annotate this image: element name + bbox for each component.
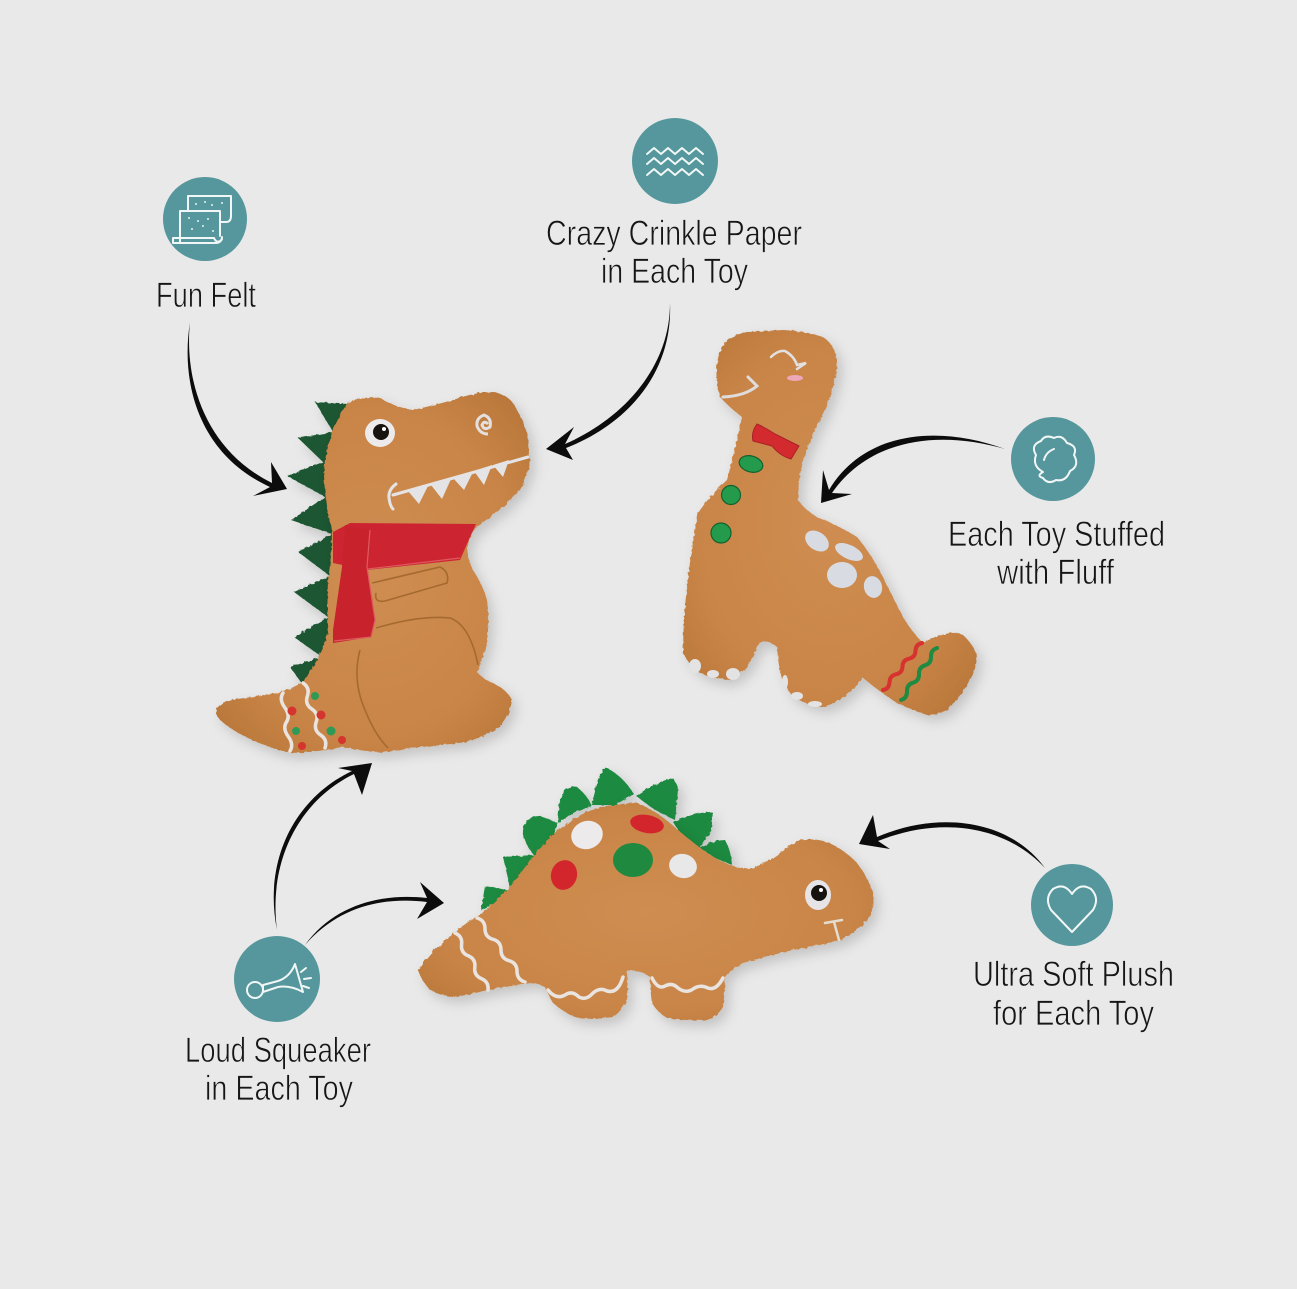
brontosaurus white toes <box>689 659 822 707</box>
t-rex arm and leg stitching <box>357 567 478 748</box>
icon: squeaker horn <box>234 936 320 1022</box>
callout: stuffed with fluff <box>948 417 1165 592</box>
toy: stegosaurus <box>418 767 873 1020</box>
brontosaurus white spots <box>801 526 885 600</box>
label: crazy crinkle paper in each toy: Crazy Crinkle Paper <box>546 214 802 253</box>
stegosaurus body <box>418 803 873 1020</box>
icon: fluff cloud <box>1011 417 1095 501</box>
stegosaurus eye <box>805 880 831 910</box>
label: ultra soft plush for each toy: Ultra Soft Plush <box>973 955 1174 994</box>
brontosaurus body <box>683 330 977 715</box>
arrow: squeaker to stegosaurus <box>305 882 444 945</box>
icon: felt sheets <box>163 177 247 261</box>
label: each toy stuffed with fluff: with Fluff <box>996 553 1114 592</box>
brontosaurus eye squiggle <box>771 351 806 369</box>
callout: fun felt <box>156 177 256 315</box>
brontosaurus tail stripes <box>883 643 937 700</box>
label: loud squeaker in each toy <box>185 1031 371 1108</box>
icon: heart <box>1031 864 1113 946</box>
label: ultra soft plush for each toy <box>973 955 1174 1033</box>
arrow: crinkle paper to t-rex <box>546 303 670 460</box>
t-rex nostril swirl <box>477 415 490 434</box>
stegosaurus mouth <box>825 920 842 940</box>
t-rex mouth and teeth <box>389 457 528 509</box>
icon: crinkle waves <box>632 118 718 204</box>
brontosaurus pink cheek <box>787 375 803 381</box>
toy: t-rex <box>216 392 530 753</box>
label: fun felt: Fun Felt <box>156 276 256 315</box>
arrow: fun felt to t-rex <box>188 322 287 496</box>
toy: brontosaurus <box>683 330 977 715</box>
t-rex tail icing <box>281 683 346 751</box>
label: crazy crinkle paper in each toy: in Each Toy <box>601 252 748 291</box>
label: crazy crinkle paper in each toy <box>546 214 802 291</box>
callout: ultra soft plush <box>973 864 1174 1033</box>
brontosaurus red bow tie <box>752 424 799 459</box>
label: each toy stuffed with fluff <box>948 515 1165 592</box>
t-rex body <box>216 392 530 753</box>
brontosaurus smile <box>723 377 757 397</box>
label: loud squeaker in each toy: Loud Squeaker <box>185 1031 371 1070</box>
brontosaurus green buttons <box>711 453 765 543</box>
t-rex green felt spikes <box>287 402 360 690</box>
label: ultra soft plush for each toy: for Each Toy <box>993 994 1154 1033</box>
t-rex eye <box>365 419 395 447</box>
callout: loud squeaker <box>185 936 371 1108</box>
t-rex red scarf <box>333 523 476 643</box>
arrow: plush to stegosaurus <box>859 815 1045 868</box>
callout: crinkle paper <box>546 118 802 291</box>
stegosaurus icing stripes <box>455 918 723 998</box>
stegosaurus spots <box>548 812 700 893</box>
stegosaurus green plates <box>481 767 732 910</box>
arrow: fluff to brontosaurus <box>821 436 1005 503</box>
label: each toy stuffed with fluff: Each Toy Stuffed <box>948 515 1165 554</box>
arrow: squeaker to t-rex <box>274 763 372 930</box>
label: loud squeaker in each toy: in Each Toy <box>205 1069 353 1108</box>
